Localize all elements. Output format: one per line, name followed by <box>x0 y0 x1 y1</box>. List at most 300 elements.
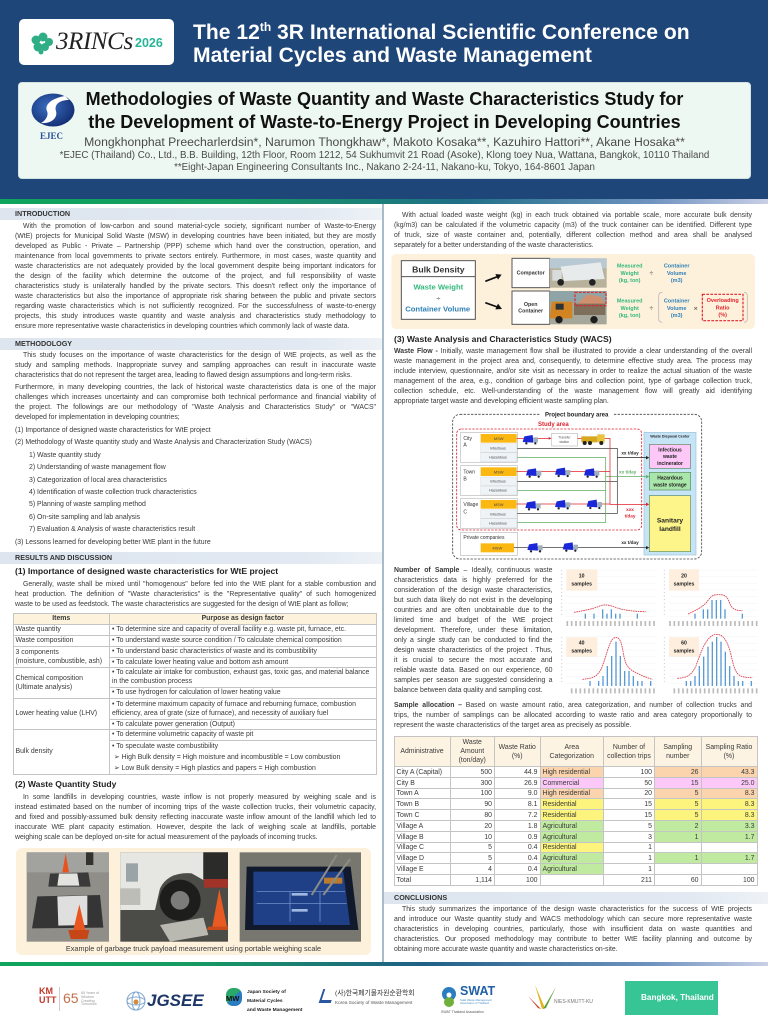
panel: weighing scale photos <box>16 848 371 955</box>
methodology text 2 <box>15 384 376 420</box>
city A group: City <box>463 436 472 442</box>
number of sample text: only a single study can be conducted to find the <box>394 637 552 644</box>
conclusions text: characteristics. Our proposed methodology may contribute to better WtE facility planning and outcome by <box>394 936 752 943</box>
table: design factors: (Ultimate analysis) <box>16 684 72 690</box>
bulk density box <box>401 261 475 319</box>
number of sample text: Number of Sample – Ideally, continuous waste <box>394 567 552 574</box>
bulk density box: Bulk Density <box>412 264 465 274</box>
logo: SWAT: Association of Thailand <box>460 1001 489 1005</box>
right column intro text: (kg/m3) can be calculated if the volumetric capacity (m3) of the truck container can be identified. Different type <box>394 222 752 229</box>
town B group <box>461 466 517 496</box>
methodology text 2: challenges which increases uncertainty and can compromise both technical performance and financial viability of <box>15 394 376 400</box>
bulk density box: ÷ <box>436 294 440 303</box>
chart: 20 samples <box>664 569 757 626</box>
introduction text: developed as Public - Private – Partnership (PPP) scheme which hand over the construction, operation, and <box>15 243 376 250</box>
poster title: the Development of Waste-to-Energy Project in Developing Countries <box>88 112 681 132</box>
table: design factors: • To use hydrogen for calculation of lower heating value <box>112 689 281 696</box>
formula: open container: (m3) <box>671 313 683 319</box>
logo: Japan Society of Material Cycles and Waste Management: MW <box>226 994 239 1003</box>
table: sample allocation: 60 <box>691 876 698 884</box>
town B group: Infectious <box>490 480 506 484</box>
section: introduction heading <box>0 208 382 220</box>
results text 1: heat production. The definition of "Waste characteristics" is the "Representative quality" of such homogenized <box>15 590 376 598</box>
flow labels: xx t/day <box>621 451 639 456</box>
table: sample allocation: Waste Ratio (%) <box>499 744 536 760</box>
chart: 40 samples <box>562 637 656 693</box>
logo: JGSEE: JGSEE <box>147 991 204 1010</box>
table: sample allocation: Town B <box>396 800 419 808</box>
methodology list: 5) Planning of waste sampling method <box>29 501 146 508</box>
right column intro text <box>394 212 752 249</box>
formula: open container: (kg, ton) <box>619 313 641 319</box>
table: design factors: • To determine size and capacity of overall facility e.g. waste pit, furnace, etc. <box>112 626 346 633</box>
table: sample allocation: 100 <box>526 876 538 884</box>
table: sample allocation: 15 <box>644 812 652 818</box>
formula: compactor: Measured <box>617 264 643 270</box>
table: sample allocation: High residential <box>542 768 590 776</box>
table: sample allocation: Residential <box>542 812 577 818</box>
table: design factors: • To speculate waste combustibility <box>112 742 218 750</box>
logo: KMUTT: KM <box>39 986 53 996</box>
arrow: to open container <box>485 303 502 309</box>
introduction text: projects, this study introduces waste quantity and waste analysis and characteristics study methodology to <box>15 313 376 320</box>
affiliations: *EJEC (Thailand) Co., Ltd., B.B. Building, 12th Floor, Room 1212, 54 Sukhumvit 21 Road (Asoke), Klong toey Nua, Wattana, Bangkok, 10110 Thailand <box>60 150 709 161</box>
table: design factors: • To calculate power generation (Output) <box>112 720 235 728</box>
table: sample allocation: 90 <box>484 800 492 808</box>
table: sample allocation: 1.7 <box>745 834 754 840</box>
table: sample allocation: Agricultural <box>542 834 577 840</box>
logo: KMUTT: 65 <box>63 990 79 1006</box>
photos <box>26 852 361 942</box>
table: sample allocation: 1 <box>648 854 652 862</box>
table: design factors: • To understand basic characteristics of waste and its combustibility <box>112 648 317 655</box>
formula: compactor: (m3) <box>671 278 683 284</box>
table: sample allocation: Commercial <box>542 780 579 786</box>
table: sample allocation: 5 <box>648 822 652 830</box>
introduction text: waste characteristics but also the importance of appropriate risk sharing between the public and private sectors <box>15 293 376 300</box>
table: sample allocation: Sampling number <box>663 744 692 760</box>
icon: EJEC logo <box>32 94 74 126</box>
sample allocation text: trips, the number of samplings can be allocated according to waste ratio and area category proportionally to <box>394 712 752 719</box>
poster title: Methodologies of Waste Quantity and Waste Characteristics Study for <box>86 89 683 109</box>
table: sample allocation: 8.3 <box>745 812 754 818</box>
table: sample allocation: 10 <box>484 834 492 840</box>
number of sample text: balance between data quality and sampling cost. <box>394 687 543 694</box>
waste disposal center: landfill <box>659 526 681 533</box>
logo: Korea Society of Waste Management: Korea Society of Waste Management <box>335 1000 412 1005</box>
table: sample allocation: 15 <box>644 800 652 808</box>
location badge: Bangkok, Thailand <box>641 993 714 1002</box>
table: sample allocation: 3.3 <box>745 822 754 830</box>
flow labels: xx t/day <box>619 470 637 475</box>
table: sample allocation: Town A <box>396 790 419 797</box>
logo: KMUTT <box>39 986 99 1011</box>
affiliations: **Eight-Japan Engineering Consultants Inc., Nakano 2-24-11, Nakano-ku, Tokyo, 164-8601 Japan <box>174 162 595 173</box>
city A group: Hazardous <box>489 455 507 459</box>
village C group: C <box>463 509 467 515</box>
number of sample text: consideration of the design waste characteristics, <box>394 587 552 594</box>
table: sample allocation: City B <box>396 780 415 786</box>
formula: compactor: (kg, ton) <box>619 278 641 284</box>
chart: 10 samples: 10 <box>579 574 585 580</box>
photo: scale on road <box>27 852 109 942</box>
methodology text 1: characteristics that do not represent the target area, leading to flawed design assumptions and long-term risks. <box>15 372 352 379</box>
flow labels <box>619 451 639 545</box>
conclusions text: characteristics in developing countries, particularly, those with insufficient data on waste quantities and <box>394 926 752 933</box>
project boundary <box>453 410 702 559</box>
city A group: Infectious <box>490 446 506 450</box>
table: design factors: Purpose as design factor <box>202 615 284 622</box>
right column intro text: of truck, size of waste container and, potentially, different collection method and area shall be analysed <box>394 232 752 239</box>
table: design factors: Chemical composition <box>16 674 83 682</box>
formula: open container: (%) <box>718 313 727 319</box>
formula: compactor: Container <box>664 264 690 270</box>
waste quantity text: instead estimated based on the number of incoming trips of the waste collection trucks, their volumetric capacity, <box>15 804 376 811</box>
table: sample allocation: Agricultural <box>542 866 577 872</box>
open container box and truck: Open <box>524 302 537 308</box>
arrow: to compactor <box>485 274 502 281</box>
authors: Mongkhonphat Preecharlerdsin*, Narumon Thongkhaw*, Makoto Kosaka**, Kazuhiro Hattori**, Akane Hosaka** <box>84 135 685 149</box>
project boundary: Project boundary area <box>545 412 609 418</box>
section: results heading <box>0 552 382 564</box>
table: design factors: • To determine volumetric capacity of waste pit <box>112 731 253 738</box>
table: sample allocation: 1 <box>695 834 698 840</box>
methodology list: 2) Understanding of waste management flow <box>29 464 166 471</box>
waste flow text: waste management in the project area and, consequently, to determine effective study area. The process may <box>394 358 752 365</box>
compactor box and truck <box>512 258 607 288</box>
open container box and truck: Container <box>518 309 543 315</box>
table: sample allocation: 1 <box>695 854 698 862</box>
table: sample allocation: 0.4 <box>528 844 538 851</box>
table: sample allocation: 5 <box>695 790 698 797</box>
introduction text: characteristics study is unilaterally handled by the private sectors. This doesn't reflect only the importance of <box>15 283 376 290</box>
table: sample allocation: 26 <box>691 768 698 776</box>
number of sample text <box>394 566 552 694</box>
poster title <box>86 89 684 132</box>
waste quantity text <box>15 794 376 841</box>
formula: compactor: Weight <box>621 271 639 277</box>
waste flow text <box>394 348 752 405</box>
table: sample allocation: 9.0 <box>528 790 538 797</box>
waste flow text: appropriate target waste and developing efficient waste sampling plan. <box>394 398 609 405</box>
conclusions text: obtaining more accurate waste quantity and waste characteristics on-site. <box>394 946 618 953</box>
transfer station: Transfer <box>558 436 571 440</box>
table: sample allocation: 8.3 <box>745 800 754 808</box>
table: sample allocation: 0.4 <box>528 854 538 862</box>
panel: bulk density diagram <box>391 254 755 329</box>
waste disposal center <box>644 432 696 555</box>
table: sample allocation: 500 <box>480 768 492 776</box>
table: sample allocation: 8.3 <box>745 790 754 797</box>
logo: KMUTT: Tomorrow <box>81 1002 97 1006</box>
methodology list: 6) On-site sampling and lab analysis <box>29 514 140 521</box>
table: design factors: ➢ High Bulk density = High moisture and incombustible = Low combustion <box>114 754 340 761</box>
header banner <box>0 0 768 204</box>
table: sample allocation: 1.7 <box>745 854 754 862</box>
waste flow text: management of the area, e.g., condition of garbage bins and collection point, type of garbage collection truck, <box>394 378 752 385</box>
introduction text: waste characteristics are not adequately provided by the local government despite being important indicators for <box>15 263 376 270</box>
table: sample allocation: 7.2 <box>528 812 538 818</box>
table: sample allocation: 3 <box>648 834 652 840</box>
chart: 40 samples: samples <box>571 648 592 654</box>
study area <box>457 422 642 530</box>
conference title <box>193 20 690 66</box>
logo: Japan Society of Material Cycles and Waste Management <box>226 988 303 1013</box>
study area: Study area <box>538 422 569 428</box>
table: design factors: Waste composition <box>16 637 73 644</box>
table: sample allocation: Waste Amount (ton/day) <box>459 739 486 764</box>
table: sample allocation: Total <box>396 876 411 884</box>
logo year: 2026 <box>135 36 163 50</box>
table: sample allocation: 5 <box>695 812 698 818</box>
waste flow text: include interview, questionnaire, and/or site visit as necessary in order to realize the actual situation of the waste <box>394 368 752 375</box>
chart: 40 samples: 40 <box>579 641 585 647</box>
conference logo <box>19 19 174 65</box>
number of sample text: design waste characteristics of the project . Thus, <box>394 647 552 654</box>
table: sample allocation: 20 <box>484 822 492 830</box>
number of sample text: it is crucial to secure the most accurate and <box>394 657 552 664</box>
number of sample text: development. Therefore, under these limitation, <box>394 627 552 634</box>
table: sample allocation: 1.8 <box>528 822 538 830</box>
transfer station: station <box>559 440 569 444</box>
conclusions text <box>394 906 752 953</box>
subheading 3: (3) Waste Analysis and Characteristics Study (WACS) <box>394 334 612 344</box>
city A group: A <box>463 443 467 449</box>
flow labels: xx t/day <box>621 540 639 545</box>
table: sample allocation: 0.9 <box>528 834 538 840</box>
formula: open container <box>617 292 747 322</box>
table: sample allocation: 44.9 <box>524 768 538 776</box>
logo: Japan Society of Material Cycles and Waste Management: Material Cycles <box>247 999 283 1004</box>
table: sample allocation: 5 <box>488 844 492 851</box>
table: sample allocation: Agricultural <box>542 854 577 862</box>
footer gradient strip <box>0 962 768 966</box>
footer logos <box>39 981 718 1015</box>
waste disposal center: Waste Disposal Center <box>650 434 690 438</box>
methodology list: (1) Importance of designed waste characteristics for WtE project <box>15 427 211 434</box>
formula: open container: Measured <box>617 299 643 305</box>
chart: 10 samples <box>562 569 656 626</box>
bulk density box: Container Volume <box>405 304 470 313</box>
icon: transfer truck <box>581 434 605 445</box>
methodology list: 3) Categorization of local area characteristics <box>29 477 167 484</box>
table: sample allocation: 26.9 <box>524 780 538 786</box>
table: design factors: Lower heating value (LHV) <box>16 710 97 717</box>
table: sample allocation: 8.1 <box>528 800 538 808</box>
private companies group: Private companies <box>463 535 505 541</box>
chart: 20 samples: samples <box>674 582 694 588</box>
waste disposal center: Sanitary <box>657 517 683 524</box>
results text 1 <box>15 580 376 608</box>
table: design factors: 3 components <box>16 648 59 656</box>
city A group <box>461 432 517 462</box>
town B group: B <box>463 476 467 482</box>
logo: Korea Society of Waste Management: (사)한국폐기물자원순환학회 <box>335 990 415 997</box>
table: sample allocation: 100 <box>640 768 652 776</box>
table: sample allocation: Residential <box>542 844 577 851</box>
arrowheads <box>549 437 649 549</box>
subheading 1: (1) Importance of designed waste characteristics for WtE project <box>15 566 278 576</box>
results text 1: Generally, waste shall be mixed until "homogenous" before fed into the WtE plant for a stable combustion and <box>23 580 376 588</box>
village C group: Infectious <box>490 512 506 516</box>
conclusions text: This study summarizes the importance of the design waste characteristics for the success of WtE projects <box>402 906 752 913</box>
table: sample allocation: 43.3 <box>741 768 754 776</box>
photo caption: Example of garbage truck payload measurement using portable weighing scale <box>66 944 321 952</box>
number of sample text: characteristics data is highly preferred for the <box>394 577 552 584</box>
location badge <box>625 981 718 1015</box>
flow labels: xxx <box>626 507 634 512</box>
city A group: MSW <box>494 436 504 441</box>
charts: sample distributions <box>561 569 758 694</box>
flow lines <box>514 438 646 548</box>
formula: open container: ÷ <box>650 305 654 312</box>
table: sample allocation: 100 <box>480 790 492 797</box>
table: sample allocation: City A (Capital) <box>396 768 442 776</box>
formula: open container: Container <box>664 299 690 305</box>
compactor box and truck: Compactor <box>517 270 545 276</box>
photo: truck on scale <box>120 852 228 942</box>
table: design factors: Waste quantity <box>16 626 61 633</box>
table: design factors: • To determine maximum capacity of furnace and reburning furnace, combustion efficiency, area of grate (size of furnace), and necessity of auxiliary fuel <box>112 700 356 716</box>
number of sample text: but such data likely do not exist in the developing <box>394 597 552 604</box>
number of sample text: limited time and budget of the WtE project <box>394 617 552 624</box>
waste disposal center: incinerator <box>657 461 683 467</box>
table: design factors: ➢ Low Bulk density = High plastics and papers = High combustion <box>114 765 316 772</box>
introduction text: (WtE) projects for Municipal Solid Waste (MSW) in developing countries have been initiated, but they are mostly <box>15 233 376 240</box>
table: sample allocation: 5 <box>695 800 698 808</box>
conclusions text: and introduce our Waste quantity study and WACS methodology which can secure more representative waste <box>394 916 752 923</box>
section: methodology heading <box>0 338 382 350</box>
logo: SWAT <box>441 984 495 1014</box>
logo: KMUTT: Creating <box>81 999 95 1003</box>
waste quantity text: In some landfills in developing countries, waste inflow is not properly measured by weighing scale and is <box>23 794 376 801</box>
table: sample allocation: 1 <box>648 866 652 872</box>
logo: NIES-KMUTT-KU: NIES-KMUTT-KU <box>554 999 593 1005</box>
logo: Japan Society of Material Cycles and Waste Management: and Waste Management <box>247 1008 303 1013</box>
logo: Japan Society of Material Cycles and Waste Management: Japan Society of <box>247 990 286 995</box>
table: sample allocation <box>394 736 758 886</box>
formula: open container: Volume <box>667 306 686 312</box>
icons: collection trucks <box>523 435 602 552</box>
table: sample allocation: Agricultural <box>542 822 577 830</box>
methodology text 1: study and sampling methods. Inappropriate survey and sampling approaches can result in inaccurate waste <box>15 362 376 369</box>
methodology list <box>15 426 312 546</box>
chart: 60 samples <box>664 634 757 693</box>
table: sample allocation: Village A <box>396 822 423 830</box>
table: sample allocation: Number of collection trips <box>607 744 651 760</box>
formula: open container: × <box>694 305 698 312</box>
table: sample allocation: 211 <box>641 876 652 884</box>
logo: NIES-KMUTT-KU <box>528 985 593 1009</box>
table: sample allocation: Area Categorization <box>550 744 594 760</box>
table: sample allocation: Town C <box>396 812 419 818</box>
table: sample allocation: 0.4 <box>528 866 538 872</box>
number of sample text: samples per season are suggested considering a <box>394 677 552 684</box>
formula: compactor <box>617 264 690 284</box>
table: sample allocation: Village E <box>396 866 424 872</box>
village C group: Village <box>463 502 478 508</box>
chart: 10 samples: samples <box>571 582 592 588</box>
logo wordmark: 3RINCs <box>56 28 133 55</box>
formula: open container: Ratio <box>716 305 730 311</box>
waste quantity text: inaccurate WtE plant capacity estimation. However, despite the lack of weighing scale at landfills, portable <box>15 824 376 831</box>
formula: open container: Overloading <box>707 298 739 304</box>
conference title: The 12th 3R International Scientific Conference on <box>193 20 690 44</box>
open container box and truck <box>512 291 607 324</box>
table: sample allocation: 20 <box>644 790 652 797</box>
section: results heading: RESULTS AND DISCUSSION <box>15 552 112 562</box>
methodology list: 4) Identification of waste collection truck characteristics <box>29 489 197 496</box>
section: conclusions heading: CONCLUSIONS <box>394 892 447 902</box>
sample allocation text <box>394 702 752 729</box>
waste flow text: Waste Flow - Initially, waste management flow shall be illustrated to provide a clear understanding of the overall <box>394 348 752 355</box>
number of sample text: reliable waste data. Based on our experience, 60 <box>394 667 552 674</box>
logo: SWAT: SWAT Thailand Association <box>441 1010 484 1014</box>
section: conclusions heading <box>384 892 768 904</box>
number of sample text: countries and are often unobtainable due to the <box>394 607 552 614</box>
introduction text: the design of the facility which determine the outcome of the project, and full responsibility of waste <box>15 273 376 280</box>
EJEC label: EJEC <box>40 131 63 141</box>
results text 1: waste to be used as feedstock. The waste characteristics are suggested for the design of WtE plant as follow; <box>15 600 348 608</box>
conference title: Material Cycles and Waste Management <box>193 44 592 66</box>
table: sample allocation: 80 <box>484 812 492 818</box>
table: sample allocation: 15 <box>691 780 698 786</box>
formula: open container: Weight <box>621 306 639 312</box>
table: sample allocation: 25.0 <box>741 780 754 786</box>
table: design factors: Bulk density <box>16 748 53 755</box>
table: sample allocation: Residential <box>542 800 577 808</box>
methodology text 1 <box>15 352 376 379</box>
formula: compactor: ÷ <box>650 270 654 277</box>
logo: SWAT: Solid Waste Management <box>460 998 492 1002</box>
methodology text 1: This study focuses on the importance of waste characteristics for the design of WtE projects, as well as the <box>23 352 376 359</box>
table: sample allocation: 50 <box>644 780 652 786</box>
affiliations <box>60 150 709 173</box>
column divider <box>382 204 384 962</box>
section: methodology heading: METHODOLOGY <box>15 339 72 348</box>
introduction text: With the promotion of low-carbon and sound material-cycle society, significant number of Waste-to-Energy <box>23 223 376 230</box>
table: design factors: • To calculate air intake for combustion, exhaust gas, toxic gas, and material balance in the combustion process <box>112 669 369 685</box>
introduction text: maintenance from local governments to private sectors entirely. Furthermore, in most cases, waste quantity and <box>15 253 376 260</box>
table: design factors: • To understand waste source condition / To calculate chemical composition <box>112 637 342 644</box>
table: sample allocation: 5 <box>488 854 492 862</box>
bulk density box: Waste Weight <box>413 282 464 291</box>
chart: 60 samples: 60 <box>681 641 687 647</box>
methodology text 2: developed for implementation in developing countries; <box>15 414 180 420</box>
logo: KMUTT: 65 Years of <box>81 991 99 995</box>
logo: Korea Society of Waste Management <box>318 989 415 1005</box>
chart: 60 samples: samples <box>674 648 694 654</box>
right column intro text: With actual loaded waste weight (kg) in each truck obtained via portable scale, more accurate bulk density <box>402 212 752 219</box>
table: sample allocation: Village B <box>396 834 424 840</box>
introduction text: regarding waste characteristics which is not sufficiently recognized. For the successfulness of waste-to-energy <box>15 303 376 310</box>
transfer station <box>552 433 577 446</box>
town B group: Hazardous <box>489 489 507 493</box>
table: sample allocation: 300 <box>480 780 492 786</box>
formula: compactor: Volume <box>667 271 686 277</box>
table: sample allocation: Administrative <box>400 748 444 755</box>
waste disposal center: waste storage <box>652 483 687 489</box>
introduction text: ensure more representative waste characteristics in developing countries which commonly lack of waste data. <box>15 323 349 330</box>
methodology list: 7) Evaluation & Analysis of waste characteristics result <box>29 526 195 533</box>
logo: KMUTT: Wisdom <box>81 995 94 999</box>
waste flow diagram <box>452 412 702 560</box>
village C group <box>461 498 517 528</box>
town B group: MSW <box>494 469 504 474</box>
subheading 2: (2) Waste Quantity Study <box>15 778 116 788</box>
town B group: Town <box>463 469 475 475</box>
photo: weighing tablet <box>240 852 361 942</box>
